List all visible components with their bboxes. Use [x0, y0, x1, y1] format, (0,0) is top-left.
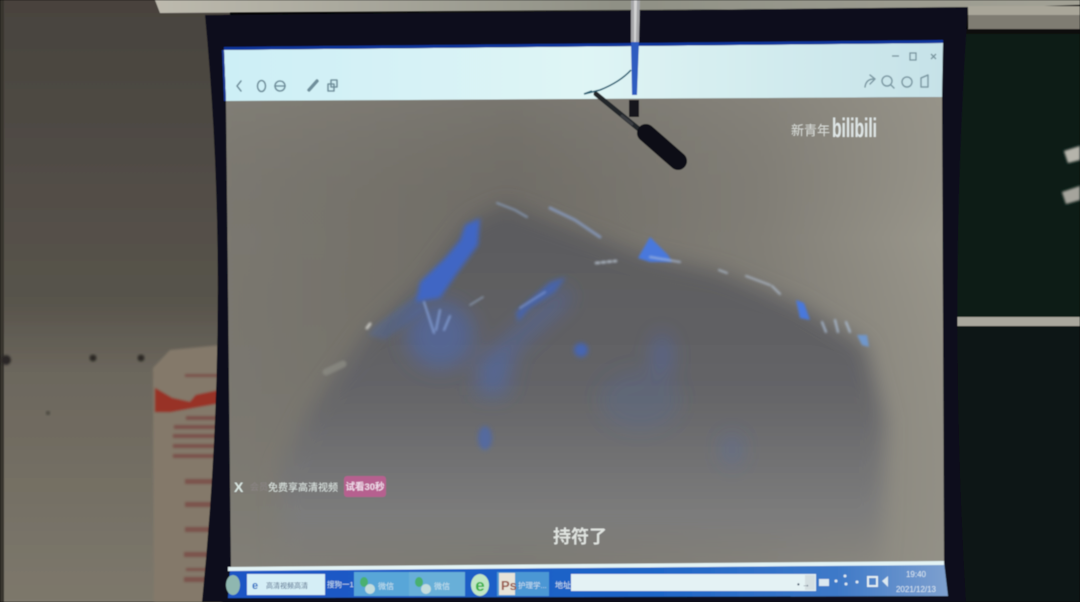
- clock: 2021/12/13: [896, 585, 937, 594]
- address box: • →: [797, 580, 810, 589]
- system tray icons: [819, 574, 888, 587]
- bilibili watermark: 新青年: [791, 123, 830, 138]
- video area: [226, 96, 944, 570]
- bilibili watermark: [791, 113, 877, 143]
- clamp: [629, 100, 639, 117]
- VIP trial prompt: X: [234, 479, 244, 495]
- title bar: [222, 40, 943, 101]
- pole seen through the projector light: [631, 42, 639, 95]
- Windows taskbar: 搜狗一1: [327, 579, 354, 589]
- projected window: [222, 40, 948, 598]
- Windows taskbar: [226, 561, 948, 598]
- taskbar app button one: [354, 572, 410, 596]
- icon: Photoshop task: 护理学...: [518, 580, 547, 590]
- trial button: 试看30秒: [345, 481, 385, 493]
- screen casing: [202, 7, 968, 602]
- icon: Photoshop task: [497, 572, 549, 596]
- address box: [571, 574, 816, 591]
- background: classroom wall: [0, 0, 230, 602]
- blue highlights on the ridge: [326, 203, 869, 466]
- start button: [226, 575, 240, 595]
- blackboard: tray: [950, 317, 1080, 326]
- active browser tab: e: [252, 580, 258, 592]
- video subtitle: 持符了: [553, 527, 607, 547]
- VIP trial prompt: 免费享高清视频: [268, 481, 338, 494]
- taskbar app button two: [409, 572, 465, 596]
- blackboard: upper panel: [950, 29, 1080, 317]
- icon group: share and tools toolbar: [865, 75, 928, 88]
- VIP trial prompt: 会员: [250, 481, 268, 492]
- microphone: [596, 94, 678, 161]
- icon: Photoshop task: Ps: [501, 578, 517, 593]
- trial button: [344, 476, 386, 497]
- taskbar app button one: 微信: [378, 581, 394, 591]
- window controls: [892, 53, 936, 60]
- taskbar app button two: 微信: [434, 581, 450, 591]
- VIP trial prompt: [234, 476, 386, 497]
- icon: browser: e: [475, 576, 485, 595]
- clock: 19:40: [906, 570, 927, 579]
- active browser tab: 高清视频高清: [266, 581, 308, 590]
- wall poster: [153, 345, 222, 602]
- pole: [631, 0, 640, 42]
- clock: [896, 570, 937, 594]
- Windows taskbar: 地址: [555, 580, 571, 590]
- icon group: navigation toolbar: [237, 80, 337, 92]
- active browser tab: [247, 574, 325, 595]
- bilibili watermark: bilibili: [832, 113, 877, 143]
- blackboard: lower panel: [950, 326, 1080, 602]
- ceiling trim strip: [155, 0, 1080, 29]
- mountain silhouette: [280, 205, 885, 570]
- icon: browser: [471, 574, 489, 596]
- ceiling mount and microphone: [584, 0, 678, 161]
- cable: [584, 70, 631, 94]
